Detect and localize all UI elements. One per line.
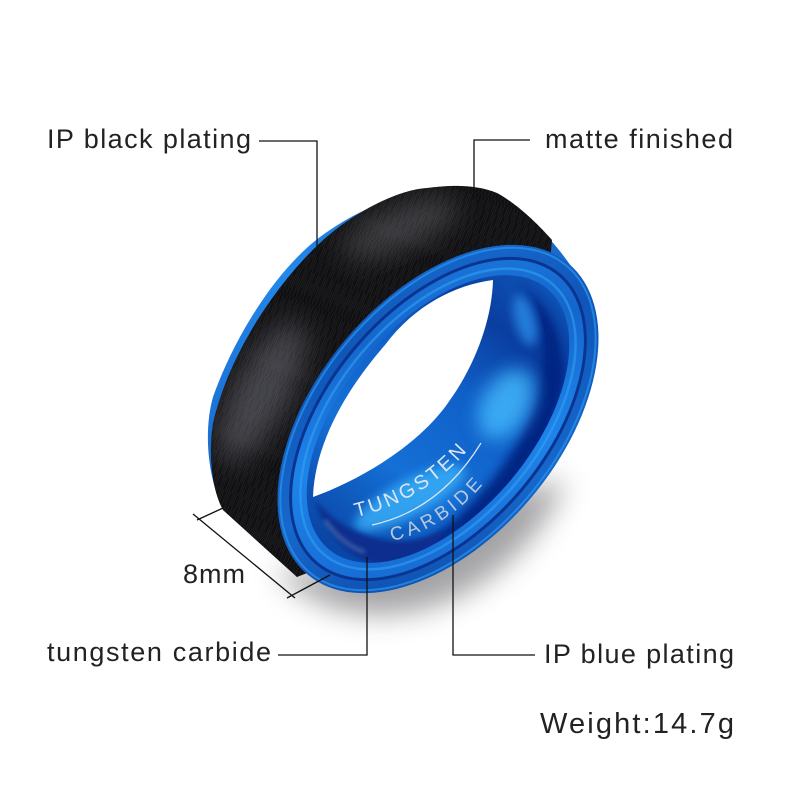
dimension: 8mm: 8mm <box>183 559 245 589</box>
callout: IP black plating <box>47 124 317 265</box>
engraving: TUNGSTEN CARBIDE: TUNGSTEN <box>353 443 466 516</box>
cavity dark right side <box>410 286 568 555</box>
ring body <box>208 186 598 594</box>
cavity lower dark lip <box>314 500 445 566</box>
engraving: TUNGSTEN CARBIDE: CARBIDE <box>390 477 482 540</box>
callout: IP blue plating: IP blue plating <box>544 639 734 669</box>
callout: tungsten carbide <box>47 557 367 667</box>
inner cavity <box>306 275 570 563</box>
drop shadow under ring <box>275 480 565 615</box>
callout: IP black plating: IP black plating <box>47 124 251 154</box>
stepped blue rim <box>214 185 662 653</box>
back blue edge <box>208 188 590 577</box>
weight label: Weight:14.7g <box>540 708 734 740</box>
cavity light reflection <box>466 359 546 449</box>
upper cavity highlight <box>509 292 541 348</box>
black brushed band <box>210 186 552 577</box>
engraved area glow <box>350 460 469 536</box>
callout: matte finished <box>474 124 733 200</box>
callout: IP blue plating <box>453 515 734 669</box>
ring product diagram <box>47 128 732 739</box>
callout: matte finished: matte finished <box>545 124 733 154</box>
dimension: 8mm <box>183 508 330 598</box>
callout: tungsten carbide: tungsten carbide <box>47 637 271 667</box>
front lip <box>235 206 641 632</box>
ring hole <box>313 280 493 497</box>
